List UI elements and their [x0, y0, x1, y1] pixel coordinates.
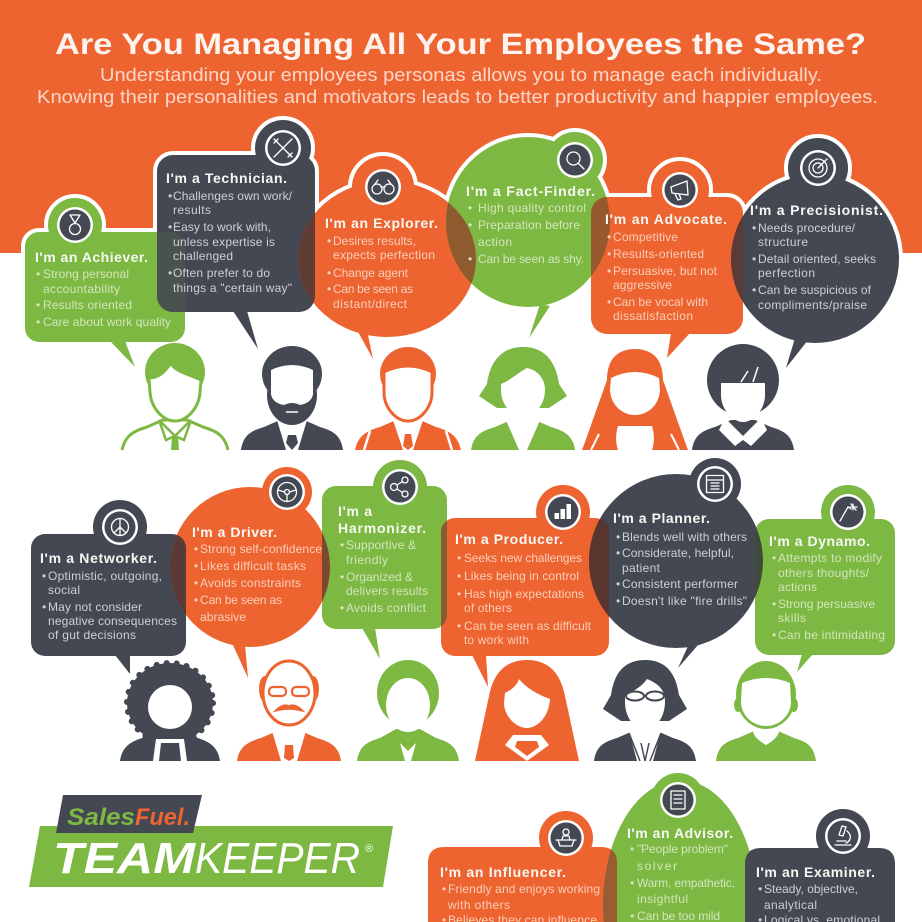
panel: explorer [298, 156, 476, 359]
bullet list: • [327, 282, 331, 296]
icon: steering wheel [269, 474, 305, 510]
bullet list: insightful [637, 892, 688, 906]
bullet list: • [340, 538, 344, 552]
bullet list: • [168, 220, 172, 234]
panel: planner [589, 458, 763, 668]
icon: crossed tools [265, 130, 301, 166]
bullet list: Challenges own work/ [173, 189, 293, 203]
panel: precisionist [731, 138, 899, 368]
bullet list: • [616, 577, 620, 591]
person: explorer [355, 347, 461, 450]
bullet list: • [752, 252, 756, 266]
bullet list [168, 189, 293, 295]
heading: I'm a [338, 503, 372, 519]
bullet list: Can be vocal with [613, 295, 708, 309]
bullet list: Results oriented [43, 298, 132, 312]
heading: I'm an Advisor. [627, 825, 733, 841]
bullet list: Strong personal [43, 267, 129, 281]
bullet list [607, 230, 718, 323]
bullet list: High quality control [478, 201, 586, 215]
bullet list: Desires results, [333, 234, 416, 248]
bullet list: compliments/praise [758, 298, 867, 312]
bullet list: actions [778, 580, 817, 594]
bullet list [758, 882, 880, 922]
bullet list: analytical [764, 898, 817, 912]
icon: bar chart [545, 494, 581, 530]
panel: advocate [591, 161, 743, 358]
bullet list: Often prefer to do [173, 266, 270, 280]
bullet list: aggressive [613, 278, 672, 292]
bullet list: dissatisfaction [613, 309, 693, 323]
bullet list: Detail oriented, seeks [758, 252, 876, 266]
person: networker [120, 663, 220, 761]
bullet list: negative consequences [48, 614, 177, 628]
person: producer [475, 660, 579, 761]
icon: share nodes [382, 469, 418, 505]
bullet list: • [194, 576, 198, 590]
bullet list: • [442, 882, 446, 896]
bullet list: • [630, 842, 634, 856]
bullet list: Organized & [346, 570, 413, 584]
panel: achiever [25, 198, 185, 367]
panel: fact-finder [446, 132, 610, 338]
bullet list: results [173, 203, 211, 217]
bullet list: of gut decisions [48, 628, 136, 642]
bullet list: Strong persuasive [778, 597, 875, 611]
bullet list: • [36, 267, 40, 281]
bullet list: • [457, 619, 461, 633]
icon: microscope [825, 818, 861, 854]
icon: magnifier [557, 142, 593, 178]
bullet list: with others [447, 898, 510, 912]
bullet list [194, 542, 322, 624]
bullet list: • [168, 189, 172, 203]
bullet list: • [36, 315, 40, 329]
person: technician [241, 346, 343, 450]
bullet list: • [607, 264, 611, 278]
bullet list: Blends well with others [622, 530, 747, 544]
bullet list: • [772, 551, 776, 565]
heading: I'm a Technician. [166, 170, 287, 186]
title: Are You Managing All Your Employees the Same? [55, 28, 866, 61]
heading: I'm an Influencer. [440, 864, 566, 880]
heading [338, 503, 426, 536]
bullet list: • [616, 530, 620, 544]
bullet list: • [468, 201, 472, 215]
bullet list: Needs procedure/ [758, 221, 856, 235]
logo: SalesFuel TeamKeeper: Sales [67, 804, 135, 831]
bullet list: others thoughts/ [778, 566, 870, 580]
heading: I'm a Precisionist. [750, 202, 883, 218]
bullet list: of others [464, 601, 512, 615]
bullet list: structure [758, 235, 808, 249]
bullet list: • [340, 570, 344, 584]
panel: influencer [428, 811, 617, 922]
person: planner [594, 660, 696, 761]
bullet list: • [752, 283, 756, 297]
bullet list [442, 882, 600, 922]
bullet list: • [327, 266, 331, 280]
bullet list: • [468, 252, 472, 266]
bullet list: • [457, 551, 461, 565]
panel: producer [441, 485, 609, 687]
logo: SalesFuel TeamKeeper: ® [365, 843, 373, 855]
bullet list: • [457, 587, 461, 601]
bullet list: friendly [346, 553, 388, 567]
heading: I'm a Driver. [192, 524, 277, 540]
bullet list: Consistent performer [622, 577, 738, 591]
bullet list: • [194, 559, 198, 573]
bullet list: • [36, 298, 40, 312]
panel: advisor [603, 773, 757, 922]
bullet list: Results-oriented [613, 247, 704, 261]
bullet list: Can be seen as [333, 282, 413, 296]
panel: examiner [745, 809, 895, 922]
subtitle: Knowing their personalities and motivators leads to better productivity and happier employees. [37, 86, 878, 107]
bullet list: • [607, 247, 611, 261]
bullet list: challenged [173, 249, 233, 263]
icon: megaphone [662, 172, 698, 208]
bullet list: • [194, 593, 198, 607]
heading: I'm an Advocate. [605, 211, 727, 227]
bullet list: Attempts to modify [778, 551, 882, 565]
bullet list: • [194, 542, 198, 556]
person: driver [237, 661, 341, 761]
bullet list: Care about work quality [43, 315, 171, 329]
bullet list [42, 569, 177, 642]
bullet list: solver [637, 859, 677, 873]
bullet list: • [758, 882, 762, 896]
heading: I'm an Explorer. [325, 215, 438, 231]
orange header background [0, 0, 922, 253]
bullet list: • [468, 218, 472, 232]
bullet list: skills [778, 611, 806, 625]
bullet list: • [616, 594, 620, 608]
heading: I'm a Dynamo. [769, 533, 870, 549]
heading: I'm an Examiner. [756, 864, 875, 880]
heading: I'm a Planner. [613, 510, 710, 526]
bullet list: • [772, 628, 776, 642]
bullet list: Likes being in control [464, 569, 579, 583]
panel: technician [157, 120, 315, 349]
bullet list: Friendly and enjoys working [448, 882, 600, 896]
bullet list: • [327, 234, 331, 248]
person: dynamo [716, 661, 816, 761]
bullet list: Strong self-confidence [200, 542, 322, 556]
bullet list: delivers results [346, 584, 428, 598]
bullet list: • [340, 601, 344, 615]
bullet list: • [616, 546, 620, 560]
heading: I'm a Networker. [40, 550, 157, 566]
bullet list: Easy to work with, [173, 220, 271, 234]
icon: calendar [697, 466, 733, 502]
bullet list: expects perfection [333, 248, 435, 262]
bullet list: Change agent [333, 266, 409, 280]
icon: medal [57, 207, 93, 243]
person: harmonizer [357, 660, 459, 761]
bullet list: accountability [43, 282, 120, 296]
bullet list: Warm, empathetic, [637, 876, 735, 890]
bullet list: Persuasive, but not [613, 264, 718, 278]
heading: I'm a Fact-Finder. [466, 183, 595, 199]
heading: I'm an Achiever. [35, 249, 148, 265]
bullet list: Can be seen as [200, 593, 282, 607]
bullet list [616, 530, 747, 608]
logo: SalesFuel TeamKeeper [29, 795, 393, 887]
icon: target [800, 150, 836, 186]
subtitle: Understanding your employees personas allows you to manage each individually. [100, 64, 822, 85]
icon: person in bath [548, 820, 584, 856]
bullet list: Supportive & [346, 538, 416, 552]
person: precisionist [692, 344, 794, 450]
bullet list [36, 267, 171, 329]
logo: SalesFuel TeamKeeper: KEEPER [195, 834, 360, 883]
bullet list: • [457, 569, 461, 583]
bullet list: unless expertise is [173, 235, 275, 249]
bullet list: • [752, 221, 756, 235]
bullet list: abrasive [200, 610, 246, 624]
bullet list [457, 551, 592, 647]
heading: Harmonizer. [338, 520, 426, 536]
bullet list: Competitive [613, 230, 678, 244]
bullet list [752, 221, 876, 312]
bullet list: Likes difficult tasks [200, 559, 306, 573]
bullet list: Steady, objective, [764, 882, 858, 896]
person: achiever [122, 343, 228, 450]
bullet list: • [630, 876, 634, 890]
bullet list: Preparation before [478, 218, 580, 232]
panel: dynamo [755, 485, 895, 672]
bullet list: Seeks new challenges [464, 551, 582, 565]
icon: peace sign [102, 509, 138, 545]
bullet list: Can be seen as shy. [478, 252, 584, 266]
bullet list [327, 234, 435, 311]
icon: dynamite spark [830, 494, 866, 530]
bullet list [340, 538, 428, 615]
panel: harmonizer [322, 460, 447, 659]
bullet list: • [772, 597, 776, 611]
bullet list: • [42, 600, 46, 614]
panel: driver [170, 467, 330, 678]
heading: I'm a Producer. [455, 531, 563, 547]
logo: SalesFuel TeamKeeper: TEAM [53, 834, 197, 883]
bullet list: Doesn't like "fire drills" [622, 594, 747, 608]
bullet list: Avoids conflict [346, 601, 427, 615]
bullet list: action [478, 235, 512, 249]
bullet list [630, 842, 735, 922]
bullet list: social [48, 583, 80, 597]
icon: clipboard [660, 782, 696, 818]
bullet list: "People problem" [637, 842, 728, 856]
bullet list: to work with [464, 633, 529, 647]
bullet list: Can be seen as difficult [464, 619, 592, 633]
logo: SalesFuel TeamKeeper: Fuel. [135, 804, 190, 831]
bullet list: perfection [758, 266, 815, 280]
bullet list: Considerate, helpful, [622, 546, 734, 560]
bullet list: distant/direct [333, 297, 408, 311]
person: advocate [582, 349, 688, 450]
bullet list: Can be intimidating [778, 628, 885, 642]
bullet list: Can be suspicious of [758, 283, 872, 297]
icon: binoculars [365, 169, 401, 205]
bullet list: Avoids constraints [200, 576, 301, 590]
bullet list [468, 201, 586, 266]
person: fact-finder [471, 347, 575, 450]
bullet list: • [607, 230, 611, 244]
subtitle [37, 64, 878, 107]
panel: networker [31, 500, 186, 674]
bullet list: Optimistic, outgoing, [48, 569, 162, 583]
bullet list: Has high expectations [464, 587, 584, 601]
bullet list: patient [622, 561, 661, 575]
bullet list: • [607, 295, 611, 309]
bullet list: • [42, 569, 46, 583]
bullet list: things a "certain way" [173, 281, 292, 295]
bullet list: May not consider [48, 600, 142, 614]
bullet list [772, 551, 885, 642]
bullet list: • [168, 266, 172, 280]
